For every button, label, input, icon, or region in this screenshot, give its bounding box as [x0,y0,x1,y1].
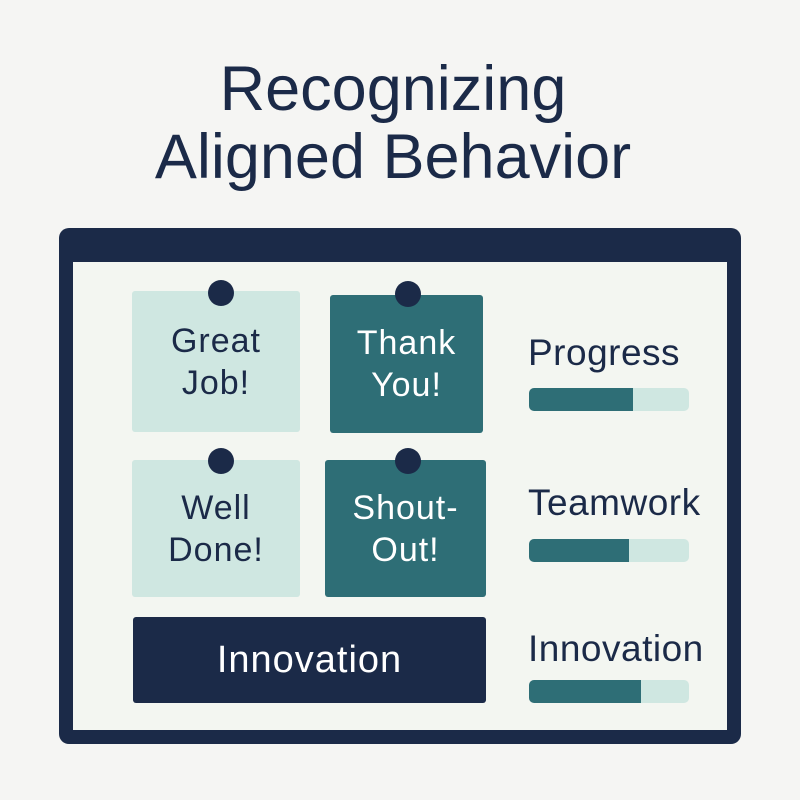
label: progress: Progress [528,332,680,373]
title: Aligned Behavior [155,122,631,192]
note: shout-out: Out! [371,530,440,568]
note: shout-out: Shout- [352,488,459,526]
note: shout-out [325,460,486,597]
note: thank you [330,295,483,433]
note: well done: Well [181,488,251,526]
pin [395,448,421,474]
note: well done: Done! [168,530,264,568]
note: great job: Great [171,322,261,360]
note: thank you: You! [371,366,442,404]
note: great job [132,291,300,432]
label: innovation: Innovation [528,628,704,669]
board surface [73,262,727,730]
pin [208,280,234,306]
note: great job: Job! [182,364,250,402]
note: well done [132,460,300,597]
board [59,228,741,744]
pin [395,281,421,307]
innovation banner: Innovation [217,639,402,681]
title [155,54,631,192]
label: teamwork: Teamwork [528,482,701,523]
title: Recognizing [220,54,566,124]
pin [208,448,234,474]
innovation banner [133,617,486,703]
bar: teamwork [529,539,689,562]
bar: innovation [529,680,689,703]
bar: progress [529,388,689,411]
note: thank you: Thank [357,324,456,362]
